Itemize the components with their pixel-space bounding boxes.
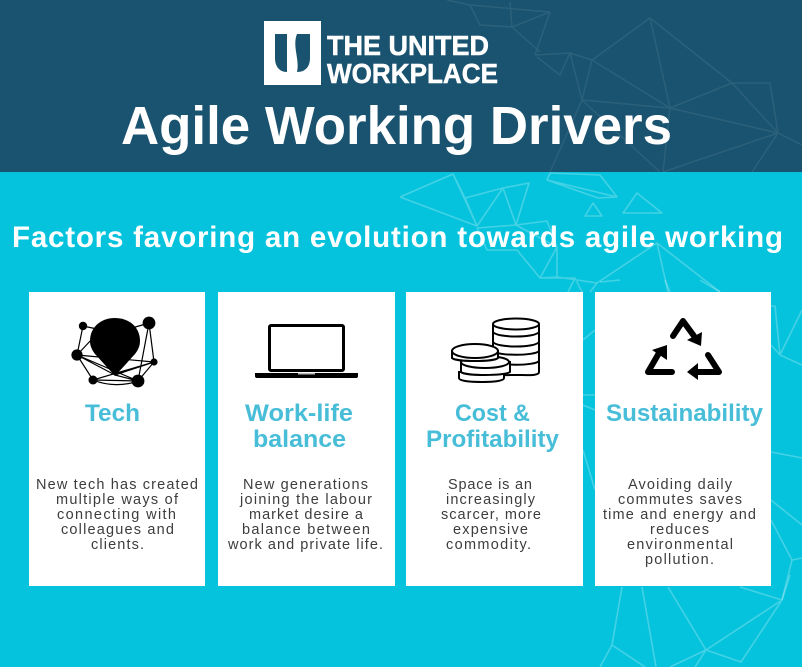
text: sustainability description: commutes saves xyxy=(618,492,742,508)
heading: work-life balance: balance xyxy=(253,426,346,453)
text: cost description xyxy=(441,477,541,553)
logo wordmark: THE UNITED xyxy=(327,30,489,61)
subtitle: Factors favoring an evolution towards agile working xyxy=(12,221,783,254)
icon: coin stacks xyxy=(452,318,539,382)
heading: tech: Tech xyxy=(85,400,140,427)
logo mark xyxy=(264,21,321,85)
title: Agile Working Drivers xyxy=(121,96,672,156)
heading: sustainability: Sustainability xyxy=(606,400,764,427)
text: work-life description: balance between xyxy=(242,522,370,538)
text: tech description: New tech has created xyxy=(36,477,198,493)
text: sustainability description: environmental xyxy=(627,537,733,553)
icon: recycle arrows xyxy=(648,321,719,380)
text: work-life description: joining the labour xyxy=(239,492,372,508)
text: sustainability description: reduces xyxy=(650,522,709,538)
heading: cost and profitability: Profitability xyxy=(426,426,560,453)
icon: laptop xyxy=(255,326,358,378)
text: tech description: colleagues and xyxy=(61,522,174,538)
text: cost description: Space is an xyxy=(448,477,532,493)
text: cost description: commodity. xyxy=(446,537,531,553)
text: tech description: multiple ways of xyxy=(56,492,179,508)
logo wordmark xyxy=(327,30,498,89)
text: cost description: scarcer, more xyxy=(441,507,541,523)
heading: work-life balance xyxy=(245,400,353,453)
text: sustainability description: time and energy and xyxy=(603,507,756,523)
heading: work-life balance: Work-life xyxy=(245,400,353,427)
text: work-life description: work and private life. xyxy=(227,537,383,553)
panel: teal background xyxy=(0,172,802,667)
logo wordmark: WORKPLACE xyxy=(327,58,498,89)
text: sustainability description xyxy=(603,477,756,568)
panel: tech xyxy=(29,292,205,586)
text: tech description: connecting with xyxy=(57,507,176,523)
panel: sustainability xyxy=(595,292,771,586)
heading: cost and profitability xyxy=(426,400,560,453)
text: cost description: expensive xyxy=(453,522,528,538)
heading: cost and profitability: Cost & xyxy=(455,400,530,427)
logo xyxy=(264,21,498,89)
text: tech description xyxy=(36,477,198,553)
text: work-life description: market desire a xyxy=(249,507,364,523)
text: cost description: increasingly xyxy=(446,492,536,508)
panel: work-life balance xyxy=(218,292,395,586)
text: work-life description: New generations xyxy=(243,477,368,493)
text: tech description: clients. xyxy=(91,537,144,553)
panel: cost and profitability xyxy=(406,292,583,586)
text: sustainability description: Avoiding daily xyxy=(628,477,733,493)
text: sustainability description: pollution. xyxy=(645,552,714,568)
panel: header background xyxy=(0,0,802,172)
icon: network pin xyxy=(71,317,158,387)
text: work-life description xyxy=(227,477,383,553)
